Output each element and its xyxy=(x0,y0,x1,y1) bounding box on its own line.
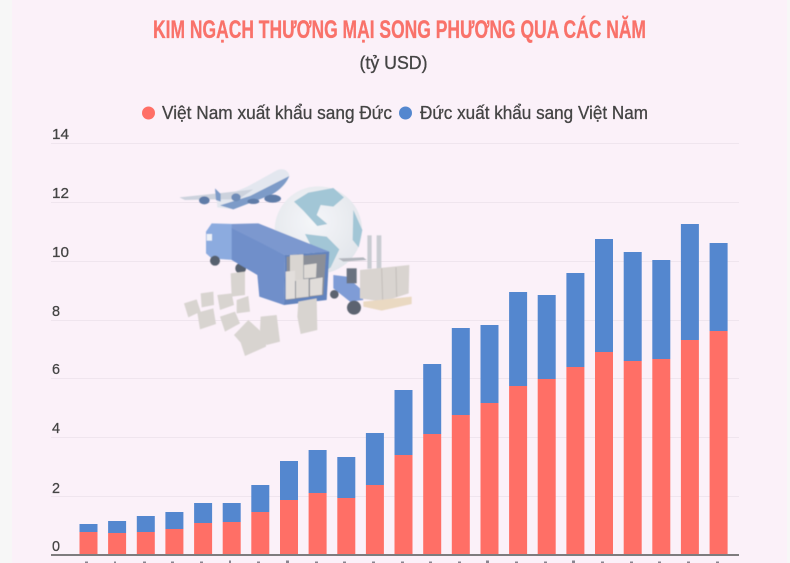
illustration: plane, globe, truck, forklift and boxes xyxy=(179,169,412,356)
y axis labels: 2 xyxy=(52,480,60,497)
y axis labels: 8 xyxy=(52,303,60,320)
icon: globe xyxy=(275,186,362,274)
icon: forklift xyxy=(330,235,412,315)
series: Germany exports to Vietnam (blue bar segments) xyxy=(80,224,728,533)
legend xyxy=(142,102,648,123)
y axis labels: 10 xyxy=(52,244,69,261)
icon: cardboard boxes xyxy=(184,272,317,356)
legend item: Germany exports: Đức xuất khẩu sang Việt Nam xyxy=(420,102,648,123)
y axis labels: 0 xyxy=(52,538,60,555)
subtitle: unit: (tỷ USD) xyxy=(360,53,428,73)
x axis labels, cropped at the image edge xyxy=(85,560,719,563)
icon: airplane xyxy=(179,169,289,209)
y axis labels: 6 xyxy=(52,361,60,378)
legend item: Vietnam exports: Việt Nam xuất khẩu sang Đức xyxy=(162,102,392,123)
series: Vietnam exports to Germany (red bar segments) xyxy=(80,331,728,554)
x axis baseline xyxy=(51,554,739,556)
bar chart xyxy=(80,224,728,554)
y axis labels: 14 xyxy=(52,126,69,143)
icon: truck xyxy=(206,223,329,305)
y axis labels: 12 xyxy=(52,185,69,202)
y axis labels xyxy=(52,126,69,555)
y axis labels: 4 xyxy=(52,420,60,437)
